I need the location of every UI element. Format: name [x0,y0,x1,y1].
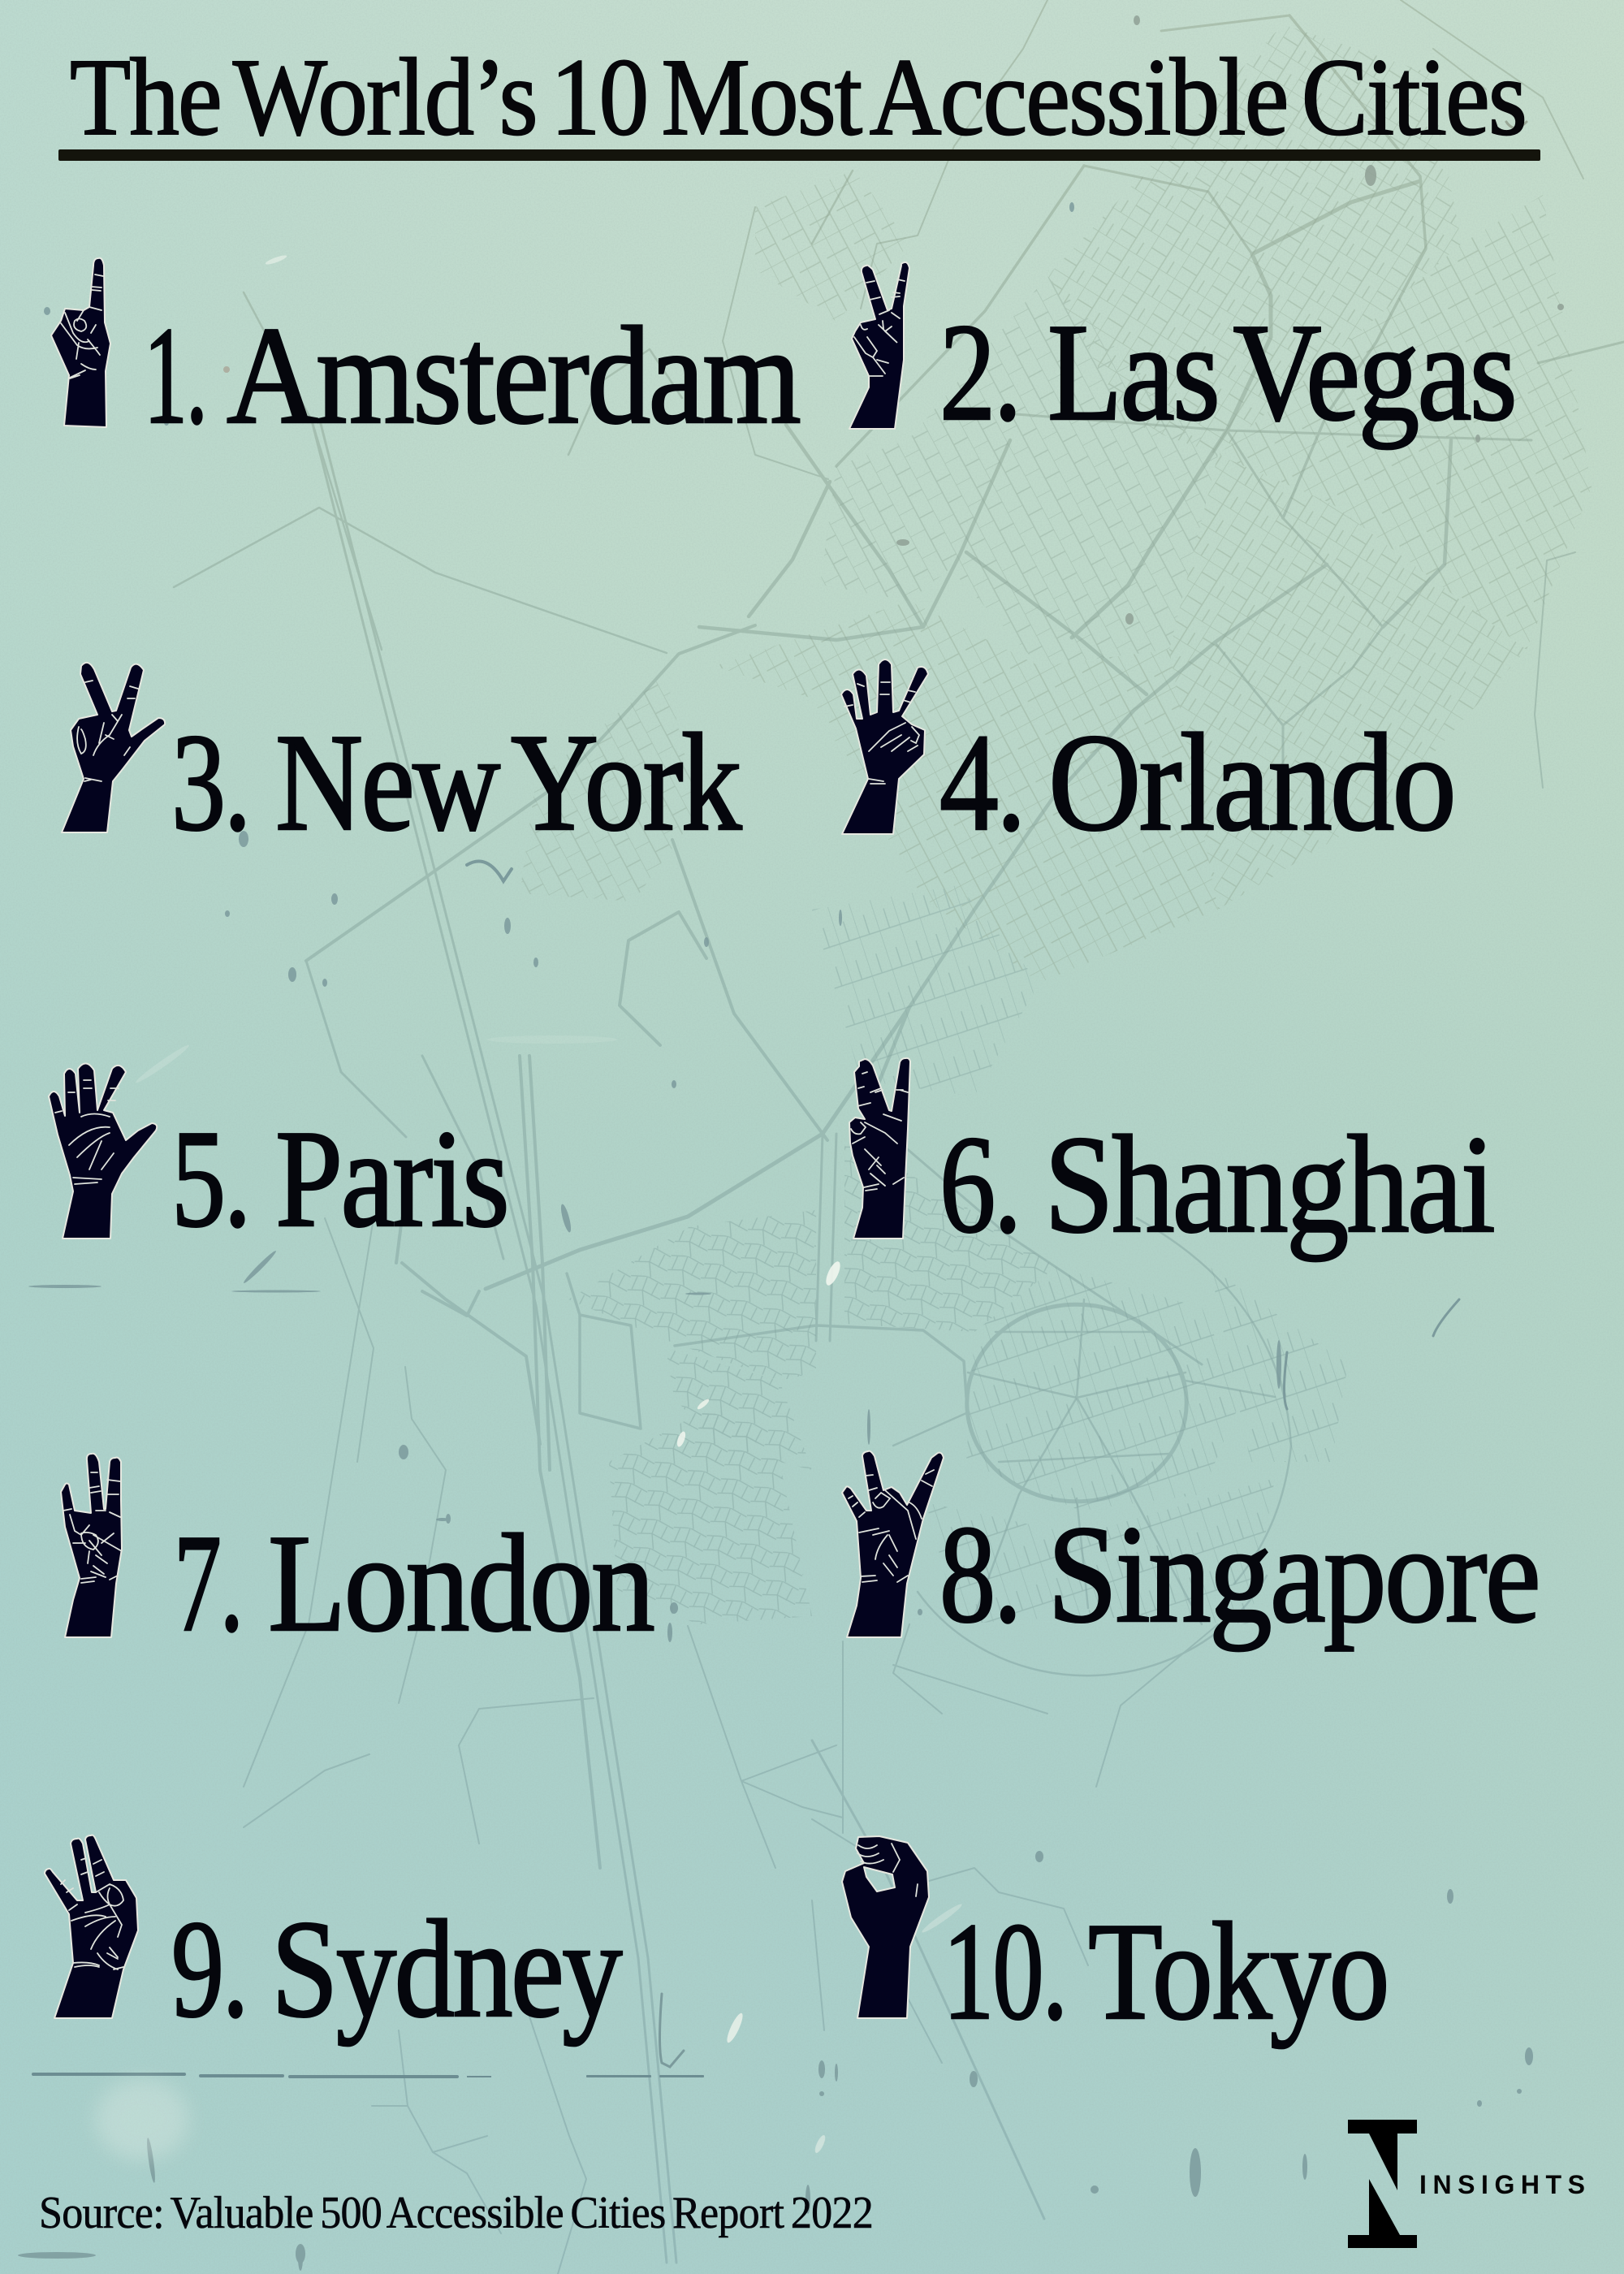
icon: hand showing six [849,1058,910,1239]
city label: Amsterdam: Amsterdam [227,299,800,453]
city label: Shanghai: 6. [939,1108,1020,1262]
city label: London: 7. [174,1507,242,1661]
icon: hand showing four [841,659,928,834]
logo: Insights: INSIGHTS [1419,2170,1585,2199]
city label: Las Vegas: Las Vegas [1047,296,1515,450]
city label: Tokyo: 10. [943,1895,1066,2049]
icon: hand showing two [849,262,909,429]
city label: Paris: Paris [275,1102,508,1256]
city label: Singapore: 8. [939,1498,1020,1652]
city label: Sydney [171,1892,623,2047]
city label: Shanghai: Shanghai [1044,1108,1493,1262]
icon: hand showing nine [45,1835,138,2018]
title underline [58,149,1540,161]
city label: Las Vegas: 2. [939,296,1020,450]
city label: Sydney: 9. [171,1892,247,2047]
city label: Paris: 5. [171,1102,249,1256]
icon: hand showing one [51,258,110,427]
logo: Insights [1348,2120,1585,2248]
icon: hand showing five [49,1063,157,1239]
city label: New York: 3. [171,706,249,860]
city label: New York: New York [275,706,742,860]
icon: hand showing ten [842,1836,929,2018]
city label: Amsterdam: 1. [144,299,206,453]
city label: Singapore: Singapore [1047,1498,1539,1652]
city label: Orlando: Orlando [1048,706,1454,860]
city label: Paris [171,1102,508,1256]
icon: hand showing three [62,663,165,832]
icon: hand showing seven [61,1454,122,1637]
city label: Sydney: Sydney [271,1892,623,2047]
icon: hand showing eight [842,1451,944,1637]
city label: Tokyo [943,1895,1388,2049]
city label: Tokyo: Tokyo [1088,1895,1388,2049]
city label: Orlando: 4. [939,706,1024,860]
city label: London: London [268,1507,654,1661]
source note: Source: Valuable 500 Accessible Cities Report 2022 [39,2188,873,2238]
